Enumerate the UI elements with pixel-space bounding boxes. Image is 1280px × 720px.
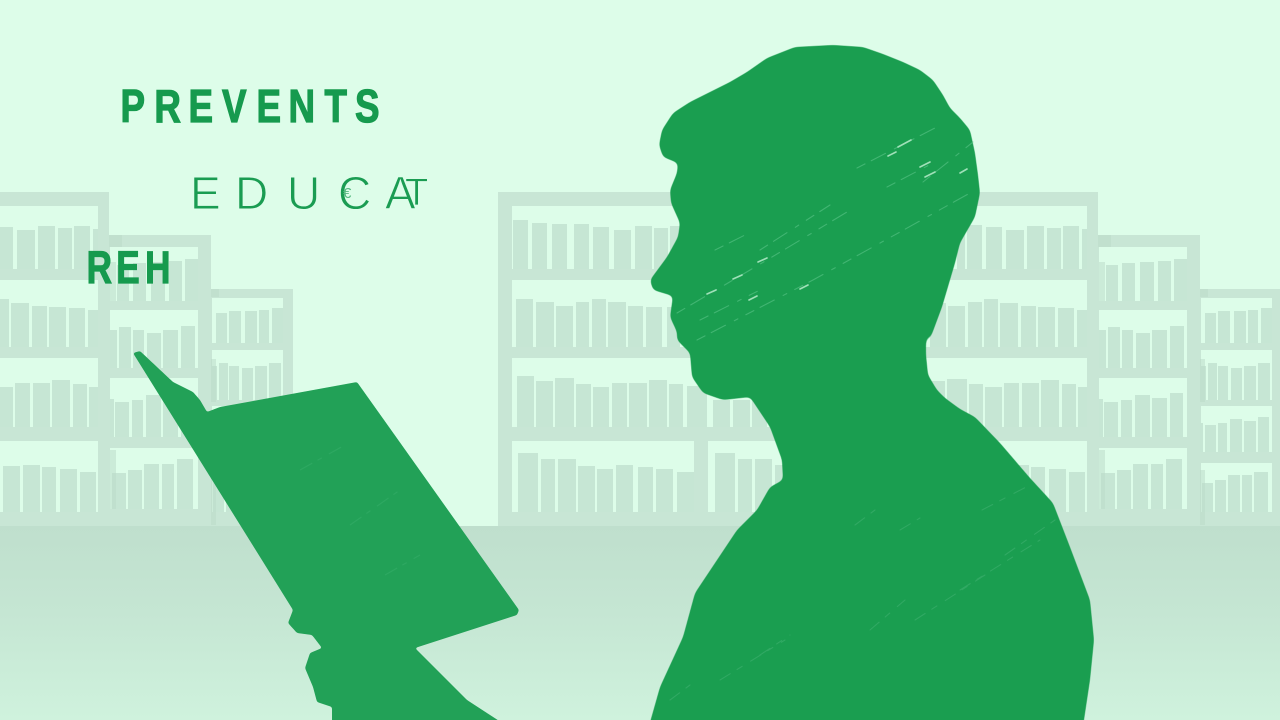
- man silhouette reading: [645, 45, 1094, 720]
- open book and hand: [133, 351, 519, 720]
- text: EDUCAT: T: [405, 172, 428, 214]
- light brush streaks across the shoulder and chest: [670, 485, 1055, 700]
- text: PREVENTS: PREVENTS: [120, 80, 380, 132]
- text: EDUCAT: EDUCA: [190, 167, 416, 219]
- library bookshelves: right group: [498, 192, 1280, 526]
- text: EDUCAT: €: [343, 185, 352, 202]
- text: REH: REH: [87, 242, 170, 293]
- light brush streaks across the face: [677, 128, 973, 340]
- book texture streaks: [300, 445, 420, 575]
- library bookshelves: left group: [0, 192, 293, 526]
- library floor: [0, 526, 1280, 720]
